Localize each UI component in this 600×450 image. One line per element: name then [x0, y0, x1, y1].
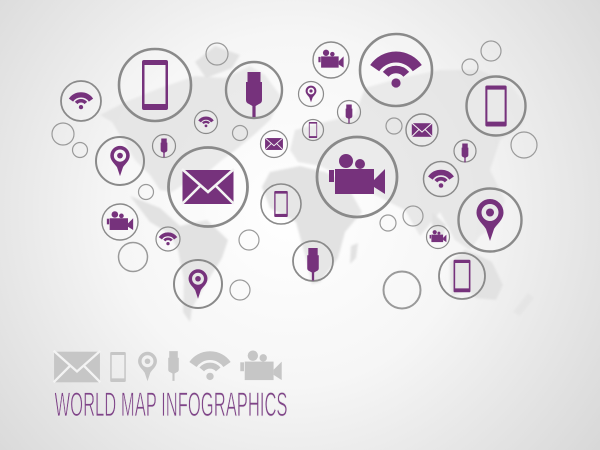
usb large — [226, 62, 282, 118]
usb small 2 — [338, 100, 360, 124]
camera large — [317, 137, 397, 217]
wifi low — [156, 227, 180, 251]
usb lower — [293, 241, 333, 281]
usb small — [152, 134, 176, 158]
wifi left — [61, 81, 101, 121]
phone small — [302, 120, 324, 140]
phone lower — [439, 253, 485, 299]
world map — [100, 46, 534, 322]
pin small — [298, 82, 324, 106]
camera small — [426, 226, 450, 248]
wifi small — [194, 110, 218, 134]
pin large — [458, 188, 522, 252]
empty circles — [52, 41, 537, 308]
mail small — [260, 130, 288, 158]
pin left — [96, 137, 144, 185]
mail right — [406, 114, 438, 146]
wifi right — [424, 162, 458, 196]
phone middle — [261, 184, 301, 224]
camera top — [313, 42, 349, 78]
camera left — [102, 204, 138, 240]
pin low — [174, 260, 222, 308]
icon circles — [61, 34, 526, 308]
phone right — [466, 76, 526, 136]
mail large — [168, 148, 248, 226]
usb right — [454, 140, 476, 162]
text: WORLD MAP INFOGRAPHICS — [54, 386, 288, 424]
wifi large — [360, 34, 432, 106]
legend icons — [54, 350, 282, 382]
phone large — [119, 49, 191, 121]
